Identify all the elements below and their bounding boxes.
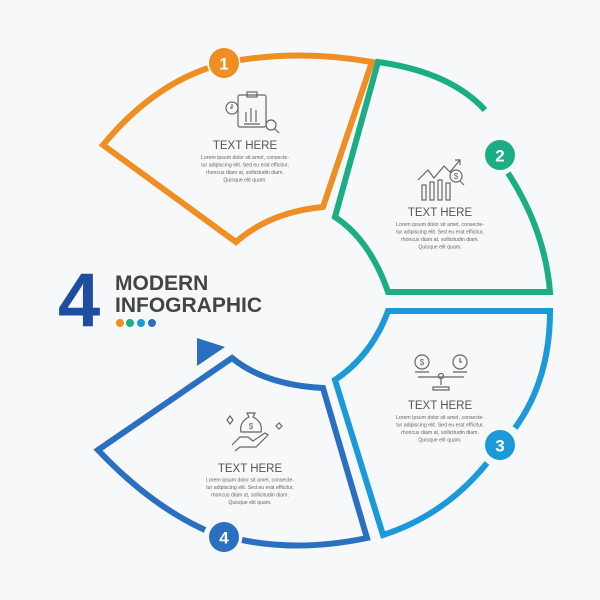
text block 2: TEXT HERE [408,207,472,219]
icon: clipboard chart [226,92,279,133]
text block 2: tur adipiscing elit. Sed eu erat efficitur, [396,230,484,236]
text block 1: Lorem ipsum dolor sit amet, consecte- [201,155,289,161]
badge 2: 2 [495,146,505,166]
text block 3: Lorem ipsum dolor sit amet, consecte- [396,415,484,421]
badge 4 [209,522,239,552]
text block 1: Quisque elit quam. [223,178,267,184]
text block 1: TEXT HERE [213,140,277,152]
text block 4 [206,463,294,506]
segment 4 blue [98,338,367,552]
text block 3: tur adipiscing elit. Sed eu erat efficitur, [396,422,484,428]
badge 1 [209,48,239,78]
text block 2: Lorem ipsum dolor sit amet, consecte- [396,222,484,228]
text block 2: rhoncus diam at, sollicitudin diam. [401,237,479,243]
text block 3: rhoncus diam at, sollicitudin diam. [401,430,479,436]
segment 1 orange [103,48,372,242]
icon: money bag hand: $ [249,422,254,431]
text block 4: Quisque elit quam. [228,500,272,506]
badge 4: 4 [219,528,229,548]
icon: growth chart [418,160,464,200]
text block 2 [396,207,484,250]
text block 2: Quisque elit quam. [418,244,462,250]
icon: scale: $ [420,358,425,367]
arrowhead [197,338,225,366]
title [58,258,262,343]
text block 3: TEXT HERE [408,400,472,412]
color dots [116,319,156,327]
segment 2 green [335,62,550,292]
segment 3 light blue [335,311,550,535]
icon: growth chart: $ [454,172,459,181]
badge 3 [485,430,515,460]
text block 4: tur adipiscing elit. Sed eu erat efficitur, [206,485,294,491]
text block 3: Quisque elit quam. [418,438,462,444]
text block 4: rhoncus diam at, sollicitudin diam. [211,492,289,498]
text block 1: rhoncus diam at, sollicitudin diam. [206,170,284,176]
badge 2 [485,140,515,170]
text block 1: tur adipiscing elit. Sed eu erat efficitur, [201,162,289,168]
icon: money bag hand [227,413,282,451]
badge 3: 3 [495,436,505,456]
text block 3 [396,400,484,444]
text block 4: Lorem ipsum dolor sit amet, consecte- [206,478,294,484]
title: INFOGRAPHIC [115,294,262,317]
text block 1 [201,140,289,184]
title: MODERN [115,272,208,295]
badge 1: 1 [219,54,229,74]
icon: scale [415,355,467,390]
title: 4 [58,258,100,343]
text block 4: TEXT HERE [218,463,282,475]
